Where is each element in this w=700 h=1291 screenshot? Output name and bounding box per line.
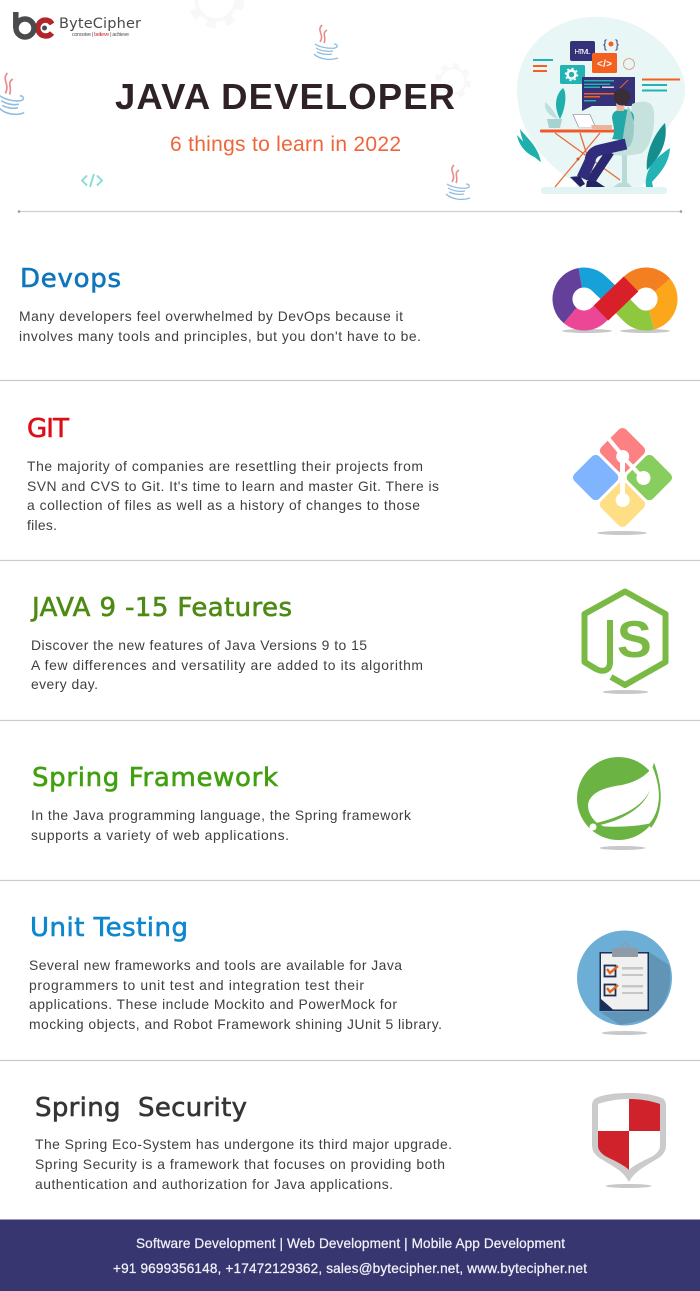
header divider [18,210,682,213]
divider [0,560,700,562]
html tile: HTML [574,47,590,56]
icon: faint gear top [191,0,241,25]
potted plant [545,88,565,128]
body text: authentication and authorization for Java applications. [35,1176,393,1192]
icon: hexagon JS [584,592,666,694]
right plant [646,123,670,187]
icon: git diamond [571,426,674,535]
heading: Devops [20,264,121,294]
panel: GIT [27,414,674,535]
body text: programmers to unit test and integration test their [29,977,364,993]
chair [600,102,654,187]
body text: Many developers feel overwhelmed by DevOps because it [19,308,403,324]
person [570,88,634,187]
panel: JAVA 9-15 Features [30,592,666,694]
body text [31,637,423,692]
body text: a collection of files as well as a history of changes to those [27,497,420,513]
laptop [573,114,604,128]
icon: faint gear near title [437,65,469,97]
heading: Unit Testing [30,913,188,943]
body text: Spring Security is a framework that focuses on providing both [35,1156,445,1172]
icon: shield [592,1093,666,1188]
illustration: developer at desk [517,17,685,194]
body text: A few differences and versatility are added to its algorithm [31,657,423,673]
body text: The majority of companies are resettling their projects from [27,458,423,474]
desk [540,130,620,187]
heading: Spring Security [35,1093,247,1123]
braces: { } [603,37,619,51]
panel: Unit Testing [29,913,672,1035]
icon: java cup top [314,25,338,59]
right lines [642,78,680,92]
body text: every day. [31,676,98,692]
panel: Devops [19,264,670,344]
gear tile [560,65,585,84]
body text: supports a variety of web applications. [31,827,289,843]
body text: involves many tools and principles, but you don't have to be. [19,328,421,344]
body text [31,807,411,843]
logo mark [16,12,52,37]
icon: hexagon JS: S [617,611,652,669]
speech bubble [582,77,635,111]
panel: Spring Framework [31,757,661,850]
subtitle: 6 things to learn in 2022 [170,133,401,156]
blob background [517,17,685,190]
panel: Spring Security [35,1093,666,1192]
logo tagline: conceive | believe | achieve [72,32,129,38]
body text [29,957,442,1032]
logo name: ByteCipher [59,16,141,32]
code tile: </> [597,59,612,70]
title: JAVA DEVELOPER [115,76,455,117]
icon: code tag [82,174,102,187]
divider [0,380,700,382]
html tile [570,41,595,61]
body text [27,458,439,533]
body text: files. [27,517,57,533]
left lines [533,59,553,72]
icon: spring leaf [577,757,661,850]
divider [0,720,700,722]
code tile [592,53,617,73]
logo: ByteCipher [16,12,141,38]
body text: Several new frameworks and tools are available for Java [29,957,402,973]
ring [624,58,634,70]
icon: clipboard checklist [577,930,672,1035]
heading: GIT [27,414,69,444]
footer services: Software Development | Web Development | Mobile App Development [136,1236,565,1251]
icon: java cup lower [446,165,470,199]
heading: JAVA 9 -15 Features [30,593,292,623]
floor [541,187,667,194]
body text: mocking objects, and Robot Framework shining JUnit 5 library. [29,1016,442,1032]
heading: Spring Framework [32,763,278,793]
divider [0,1060,700,1062]
body text [19,308,421,344]
icon: java cup left [0,73,24,114]
left plant [517,129,541,162]
footer [0,1220,700,1291]
divider [0,880,700,882]
body text: SVN and CVS to Git. It's time to learn and master Git. There is [27,478,439,494]
footer contacts: +91 9699356148, +17472129362, sales@bytecipher.net, www.bytecipher.net [113,1261,587,1276]
body text: In the Java programming language, the Spring framework [31,807,411,823]
body text: Discover the new features of Java Versions 9 to 15 [31,637,367,653]
body text [35,1136,452,1192]
body text: applications. These include Mockito and PowerMock for [29,996,397,1012]
icon: infinity [562,277,670,333]
body text: The Spring Eco-System has undergone its third major upgrade. [35,1136,452,1152]
